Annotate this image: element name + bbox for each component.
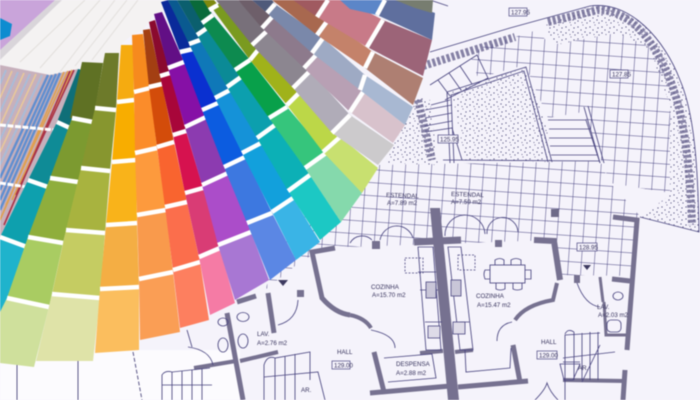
fan strip: burgundy to pink bbox=[149, 20, 235, 315]
plan: room labels: LAV. bbox=[257, 331, 270, 338]
fan strip: golden yellow bbox=[95, 45, 139, 353]
fan strip: steel blues bbox=[252, 0, 413, 125]
fan strip: green to mint bbox=[189, 0, 362, 222]
plan: room labels: AR. bbox=[301, 387, 312, 394]
plan: dining table and chairs bbox=[484, 258, 531, 290]
plan: room labels: COZINHA bbox=[476, 293, 505, 300]
plan: room labels: ESTENDAL bbox=[386, 192, 419, 200]
fan strip: purple bbox=[154, 12, 269, 300]
fan strip: sky blue bbox=[168, 0, 320, 260]
bottom-left paper sheet bbox=[0, 350, 240, 400]
plan: room labels: 129.00 bbox=[334, 362, 353, 370]
plan: garden stipple areas bbox=[385, 5, 699, 232]
fan strip: olive to pale yellow bbox=[36, 53, 119, 361]
fan strip: teal to turquoise bbox=[177, 0, 341, 240]
plan: room labels: HALL bbox=[541, 339, 557, 346]
fan strip: olive to pale green bbox=[0, 62, 103, 367]
plan: level boxes upper: 127.85 bbox=[612, 72, 631, 78]
plan: central planter and stairs bbox=[425, 55, 604, 163]
fan strip: blues bbox=[340, 0, 435, 40]
plan: room labels: 128.95 bbox=[579, 244, 598, 252]
fan strip: roses bbox=[293, 0, 432, 76]
plan: floor walls bbox=[194, 208, 637, 400]
plan: direction markers bbox=[278, 265, 591, 286]
plan: staircases bbox=[162, 330, 615, 400]
fan strip: dark sage bbox=[395, 0, 433, 13]
plan: room labels: A=15.70 m2 bbox=[372, 292, 406, 299]
plan: level boxes upper bbox=[438, 8, 631, 144]
plan: room labels: HALL bbox=[337, 349, 353, 356]
plan: room labels: ESTENDAL bbox=[451, 191, 484, 199]
plan: room labels: A=7.89 m2 bbox=[387, 200, 418, 207]
plan: room labels: A=2.76 m2 bbox=[257, 340, 288, 347]
plan: level boxes upper: 127.95 bbox=[511, 10, 530, 16]
fan strip: royal blue bbox=[161, 0, 296, 280]
plan: kitchen sinks bbox=[426, 280, 465, 338]
fan strip: teal bbox=[0, 69, 87, 315]
fan strip: greys bbox=[216, 0, 394, 165]
plan: room labels bbox=[257, 191, 629, 394]
fan strip: orange bbox=[132, 34, 180, 340]
fan strip: mauves bbox=[238, 0, 405, 143]
plan: room labels: DESPENSA bbox=[396, 361, 431, 368]
plan: bathroom fixtures bbox=[218, 292, 623, 352]
plan: room labels: COZINHA bbox=[371, 284, 400, 291]
fan strip: olive to lime bbox=[203, 0, 378, 193]
plan: room labels: 129.00 bbox=[539, 352, 558, 360]
fan strip: brown to coral bbox=[143, 29, 209, 328]
corner: purple photo backdrop bbox=[0, 0, 65, 60]
fan: white unpainted sheets bbox=[0, 0, 168, 75]
plan: room labels: A=7.59 m2 bbox=[451, 199, 482, 206]
plan: level boxes upper: 125.95 bbox=[440, 136, 459, 144]
plan: garden outlines and plant border bbox=[418, 0, 699, 232]
plan: room labels: LAV. bbox=[597, 304, 610, 311]
plan: room labels: A=15.47 m2 bbox=[477, 302, 511, 309]
fan: compressed multicolour strips bbox=[0, 65, 78, 237]
plan: door arcs and thin details bbox=[187, 215, 600, 400]
plan: room labels: A=2.03 m2 bbox=[598, 312, 629, 319]
fan strip: tans bbox=[272, 0, 423, 105]
plan: room labels: AR. bbox=[578, 365, 589, 372]
plan: terrace tile grids bbox=[265, 30, 670, 290]
plan: room labels: A=2.88 m2 bbox=[396, 370, 427, 377]
